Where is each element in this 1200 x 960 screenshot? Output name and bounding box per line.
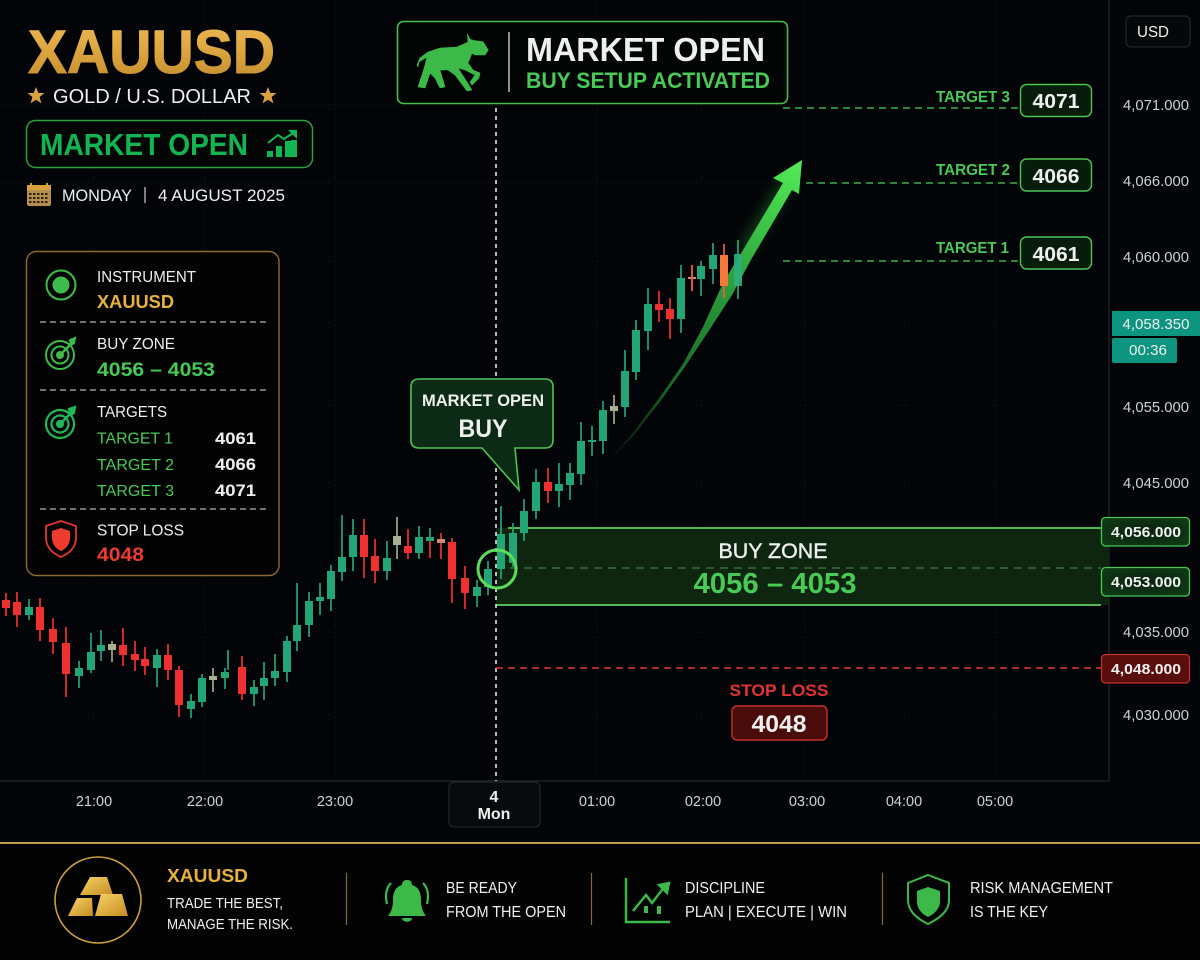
- target rows: 4066: [215, 455, 256, 474]
- target 1: [783, 237, 1092, 269]
- target 2: [806, 159, 1092, 191]
- time axis: 01:00: [579, 794, 615, 810]
- footer: discipline: [626, 878, 847, 922]
- time axis: [76, 794, 1013, 810]
- footer: brand: TRADE THE BEST,: [167, 896, 283, 912]
- icon: instrument dot: [46, 270, 76, 300]
- date marker on time axis: [449, 782, 540, 827]
- icon: buy zone target: [46, 338, 75, 369]
- price axis: [1123, 98, 1189, 724]
- footer: be ready: FROM THE OPEN: [446, 904, 566, 921]
- icon: stop loss shield: [46, 521, 76, 557]
- target rows: TARGET 2: [97, 457, 174, 474]
- icon: bull: [417, 34, 488, 91]
- panel: trade summary: 4048: [97, 545, 144, 566]
- candlestick chart: [6, 240, 738, 718]
- date marker on time axis: 4: [490, 789, 499, 806]
- icon: growth chart: [626, 878, 670, 922]
- buy zone band: 4056 – 4053: [694, 568, 856, 600]
- price axis: 4,066.000: [1123, 174, 1189, 190]
- time axis: 04:00: [886, 794, 922, 810]
- panel: trade summary: [26, 252, 279, 576]
- date row: MONDAY: [62, 186, 132, 205]
- price tag 4053: [1102, 568, 1190, 596]
- target rows: 4061: [215, 429, 256, 448]
- footer: discipline: DISCIPLINE: [685, 880, 765, 897]
- date marker on time axis: Mon: [478, 806, 510, 823]
- date row: 4 AUGUST 2025: [158, 186, 285, 205]
- target 3: [783, 84, 1092, 116]
- callout: market open buy: [411, 379, 553, 490]
- footer: risk management: RISK MANAGEMENT: [970, 880, 1113, 897]
- stop loss label: [730, 681, 828, 740]
- icon: bell: [386, 880, 428, 922]
- footer: brand: MANAGE THE RISK.: [167, 917, 293, 933]
- icon: targets: [46, 407, 75, 438]
- current price tag: [1112, 311, 1200, 363]
- current price tag: 4,058.350: [1122, 317, 1190, 333]
- market open badge: MARKET OPEN: [40, 127, 248, 162]
- panel: trade summary: 4056 – 4053: [97, 360, 215, 381]
- target rows: [97, 429, 256, 500]
- time axis: 23:00: [317, 794, 353, 810]
- stop loss label: 4048: [752, 711, 806, 738]
- price axis: 4,060.000: [1123, 250, 1189, 266]
- target rows: TARGET 1: [97, 430, 173, 448]
- time axis: 05:00: [977, 794, 1013, 810]
- header panel: market open: [398, 22, 788, 104]
- buy zone band: BUY ZONE: [718, 540, 828, 563]
- title: XAUUSD: [28, 18, 275, 86]
- footer: risk management: IS THE KEY: [970, 904, 1048, 921]
- time axis: 21:00: [76, 794, 112, 810]
- header panel: market open: MARKET OPEN: [526, 31, 765, 68]
- axis lines: [0, 0, 1109, 781]
- price axis: 4,071.000: [1123, 98, 1189, 114]
- price axis: 4,035.000: [1123, 625, 1189, 641]
- stop loss line: [496, 667, 1101, 669]
- footer: risk management: [908, 875, 1113, 924]
- footer dividers: [346, 873, 882, 925]
- price axis: 4,045.000: [1123, 476, 1189, 492]
- icon: calendar: [27, 183, 51, 206]
- price axis: 4,030.000: [1123, 708, 1189, 724]
- header panel: market open: BUY SETUP ACTIVATED: [526, 68, 770, 93]
- target 2: 4066: [1032, 165, 1080, 188]
- footer: brand: [55, 857, 293, 943]
- price tag 4048: 4,048.000: [1111, 661, 1181, 678]
- target 1: 4061: [1032, 243, 1080, 266]
- target 1: TARGET 1: [936, 240, 1009, 257]
- entry circle: [478, 550, 516, 588]
- panel: trade summary: TARGETS: [97, 404, 167, 421]
- footer: brand: XAUUSD: [167, 866, 248, 886]
- time axis: 03:00: [789, 794, 825, 810]
- footer: be ready: [386, 880, 566, 922]
- rising arrow: [603, 160, 802, 467]
- target rows: 4071: [215, 481, 256, 500]
- footer: discipline: PLAN | EXECUTE | WIN: [685, 904, 847, 921]
- subtitle with stars: GOLD / U.S. DOLLAR: [53, 85, 251, 108]
- price tag 4048: [1102, 654, 1190, 683]
- buy zone band: [496, 528, 1109, 605]
- panel: trade summary: INSTRUMENT: [97, 269, 196, 286]
- currency box: USD: [1137, 24, 1169, 41]
- time axis: 22:00: [187, 794, 223, 810]
- target 2: TARGET 2: [936, 162, 1010, 179]
- callout: market open buy: MARKET OPEN: [422, 391, 544, 410]
- time axis: 02:00: [685, 794, 721, 810]
- chart grid: [0, 0, 1109, 781]
- panel: trade summary: BUY ZONE: [97, 336, 175, 353]
- callout: market open buy: BUY: [458, 415, 508, 443]
- market open vertical marker: [495, 108, 497, 781]
- icon: gold bars: [68, 877, 128, 916]
- price tag 4053: 4,053.000: [1111, 574, 1181, 591]
- icon: shield: [908, 875, 949, 924]
- market open badge: [26, 120, 312, 168]
- currency box: [1126, 16, 1190, 47]
- current price tag: 00:36: [1129, 343, 1167, 359]
- target 3: 4071: [1032, 90, 1080, 113]
- icon: rising bars: [267, 130, 297, 157]
- stop loss label: STOP LOSS: [730, 681, 828, 700]
- price tag 4056: 4,056.000: [1111, 524, 1181, 541]
- panel: trade summary: XAUUSD: [97, 292, 174, 312]
- target 3: TARGET 3: [936, 89, 1010, 106]
- price tag 4056: [1102, 518, 1190, 546]
- footer: be ready: BE READY: [446, 880, 517, 897]
- panel: trade summary: STOP LOSS: [97, 522, 184, 540]
- date row: [27, 183, 285, 206]
- price axis: 4,055.000: [1123, 400, 1189, 416]
- target rows: TARGET 3: [97, 483, 174, 500]
- footer band: [0, 842, 1200, 960]
